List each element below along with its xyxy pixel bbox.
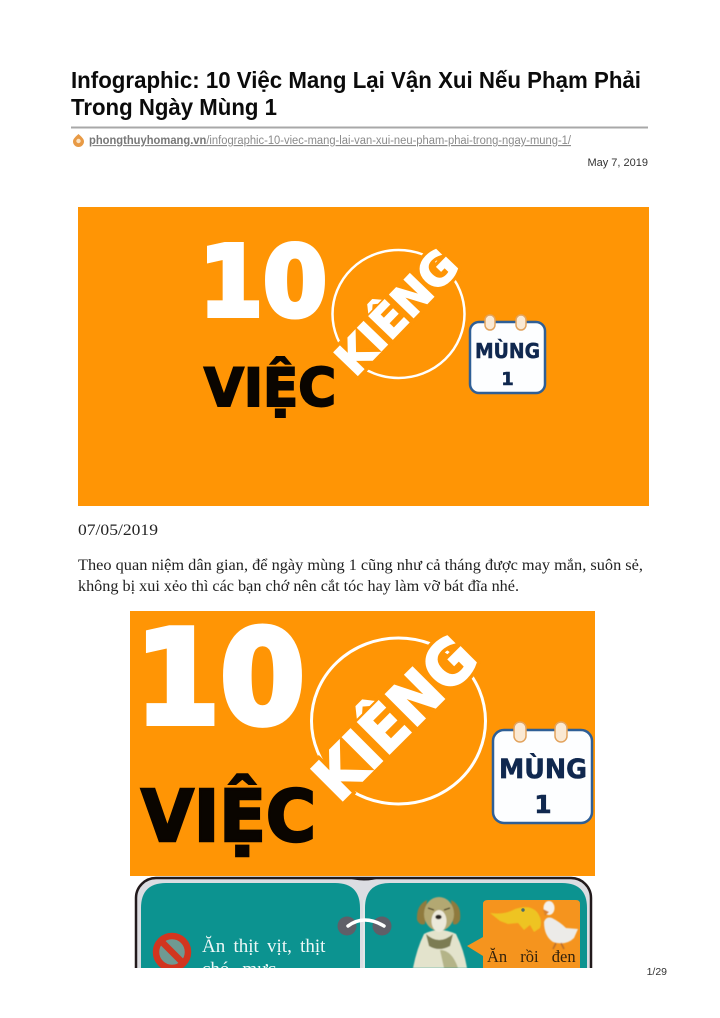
binder ring — [338, 916, 392, 936]
left page — [141, 883, 360, 968]
calendar MÙNG 1: MÙNG — [475, 339, 540, 363]
speech bubble — [467, 900, 580, 968]
calendar MÙNG 1: 1 — [534, 790, 552, 819]
left page text: chó, mực — [202, 959, 276, 980]
bubble text: Ăn rồi đen — [487, 947, 576, 966]
calendar MÙNG 1: MÙNG — [499, 753, 587, 785]
number 10: 10 — [199, 226, 327, 338]
circle — [332, 250, 464, 378]
intro paragraph: Theo quan niệm dân gian, để ngày mùng 1 cũng như cả tháng được may mắn, suôn sẻ, — [78, 557, 643, 574]
left page text — [202, 936, 326, 968]
word KIÊNG: KIÊNG — [325, 239, 469, 386]
calendar MÙNG 1 — [493, 722, 592, 823]
source url: phongthuyhomang.vn/infographic-10-viec-mang-lai-van-xui-neu-pham-phai-trong-ngay-mung-1/ — [89, 135, 572, 147]
calendar MÙNG 1: 1 — [501, 369, 514, 390]
word KIÊNG: KIÊNG — [299, 622, 492, 815]
calendar MÙNG 1 — [470, 315, 545, 393]
left page text: Ăn thịt vịt, thịt — [202, 936, 326, 957]
number 10: 10 — [135, 602, 305, 754]
book illustration — [134, 876, 592, 968]
title — [71, 67, 641, 120]
title: Infographic: 10 Việc Mang Lại Vận Xui Nếu Phạm Phải — [71, 67, 641, 93]
word VIỆC: VIỆC — [204, 356, 336, 419]
page number: 1/29 — [647, 966, 667, 978]
circle — [312, 638, 486, 804]
right page — [365, 883, 587, 968]
intro paragraph — [78, 557, 643, 595]
icon: site logo — [73, 134, 84, 147]
banner image 2 — [130, 602, 595, 876]
title: Trong Ngày Mùng 1 — [71, 94, 277, 120]
intro paragraph: không bị xui xẻo thì các bạn chớ nên cắt tóc hay làm vỡ bát đĩa nhé. — [78, 578, 519, 595]
fish — [490, 907, 541, 932]
article date: 07/05/2019 — [78, 522, 158, 539]
banner image 1 — [78, 207, 649, 506]
word VIỆC: VIỆC — [141, 774, 316, 858]
date: May 7, 2019 — [587, 157, 648, 169]
duck — [543, 901, 578, 949]
word KIÊNG: KIÊNG — [299, 622, 492, 815]
icon: prohibition sign — [156, 936, 188, 968]
word KIÊNG: KIÊNG — [325, 239, 469, 386]
dog — [413, 897, 467, 968]
